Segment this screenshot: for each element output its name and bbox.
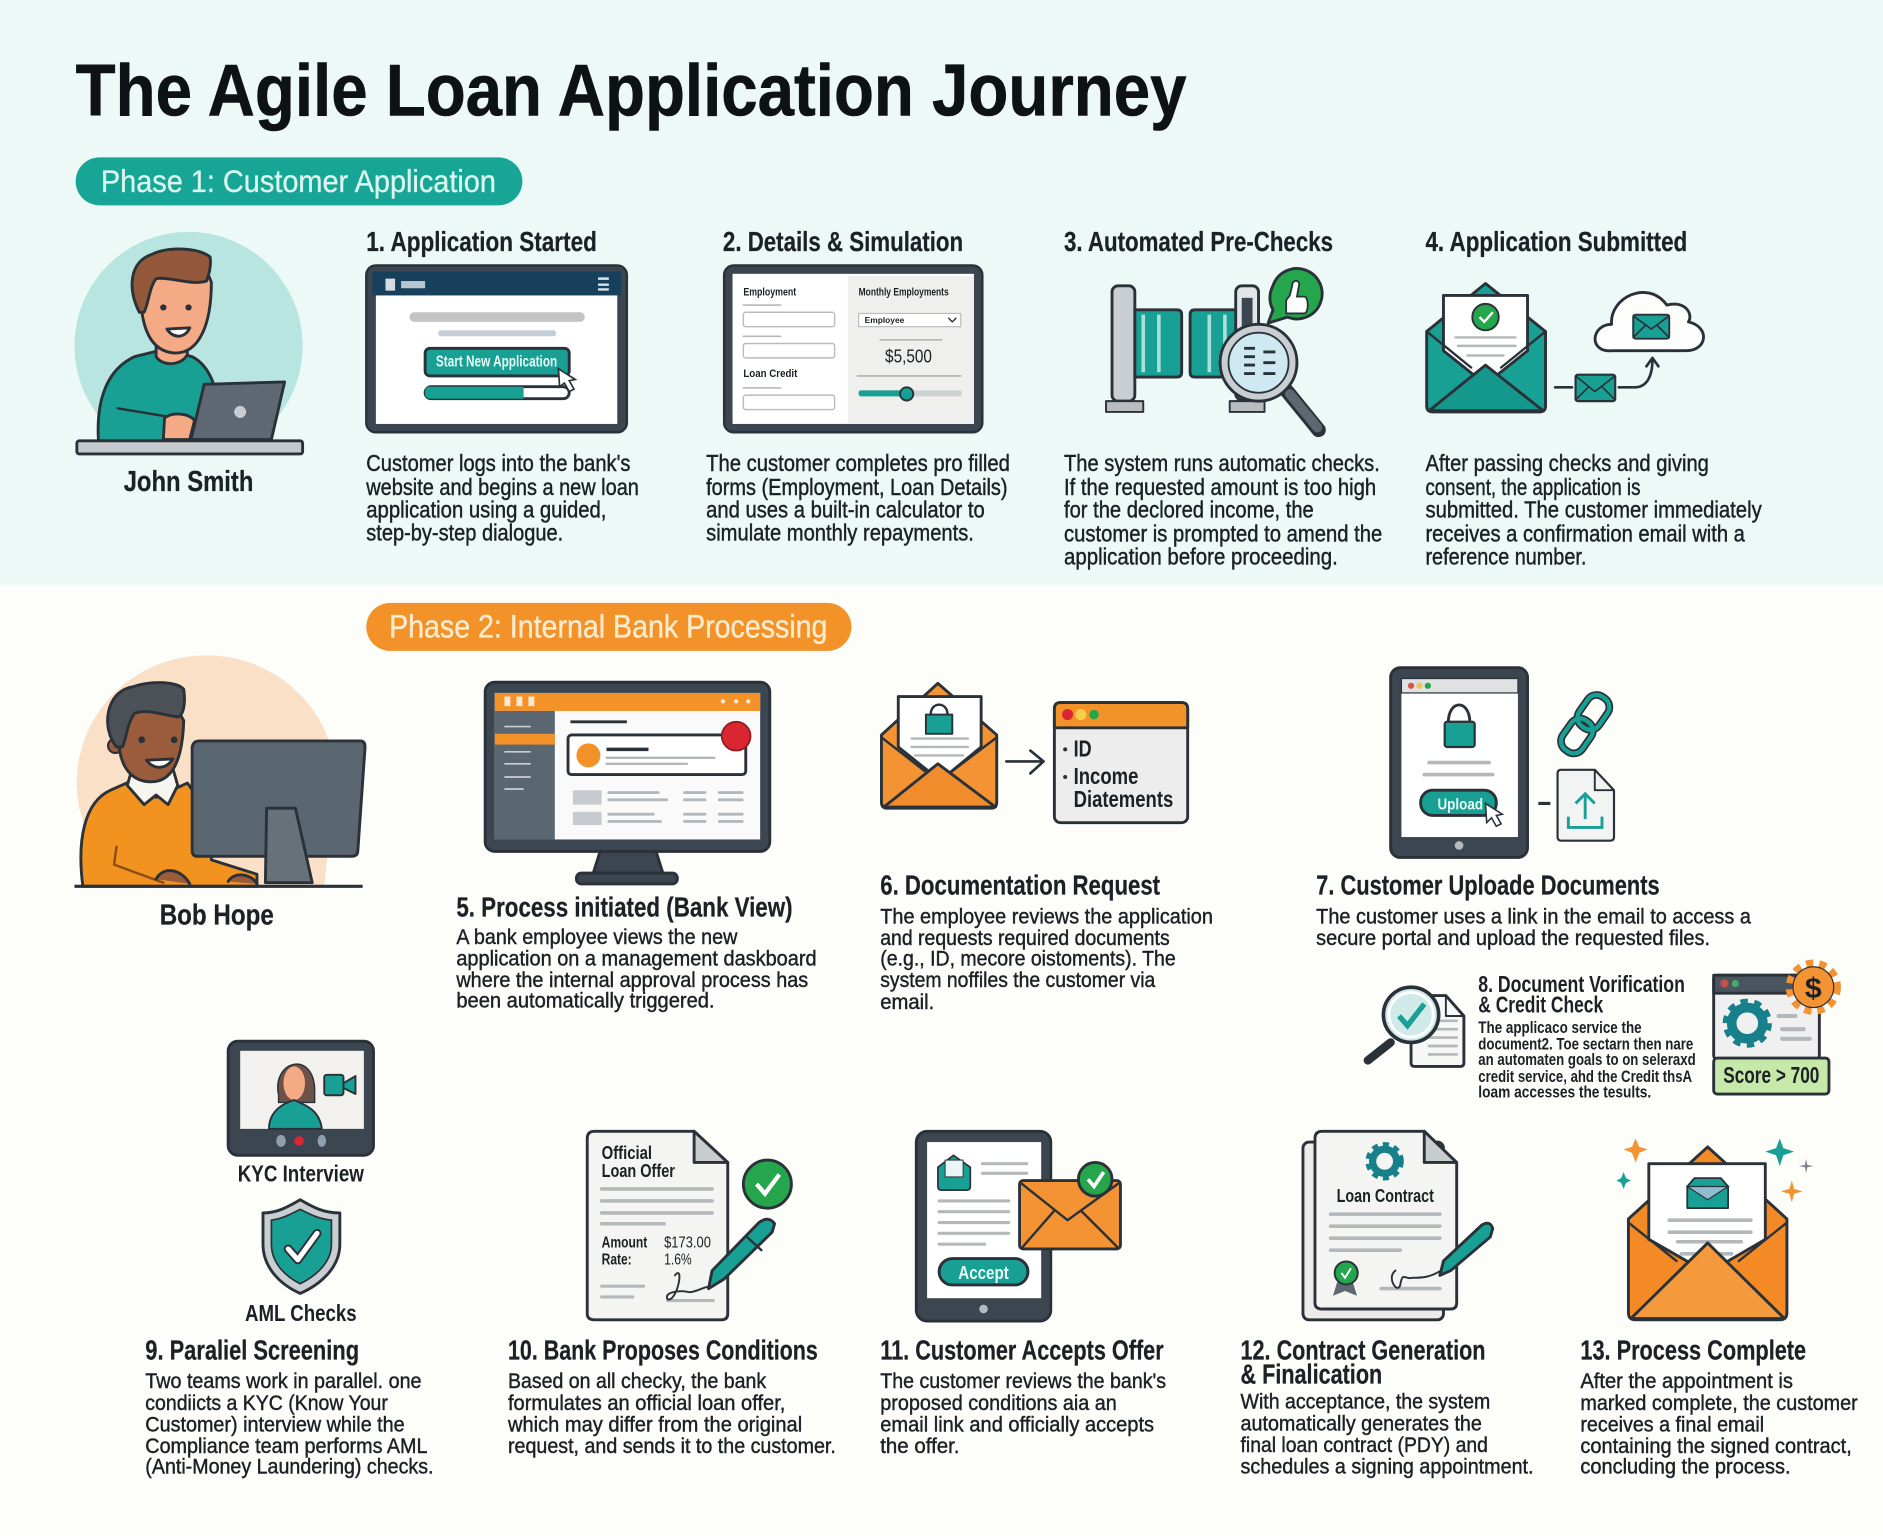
description: request, and sends it to the customer. — [508, 1433, 836, 1458]
heading: 12. Contract Generation — [1241, 1334, 1486, 1365]
description: receives a final email — [1580, 1411, 1764, 1436]
phase 1 pill — [76, 157, 522, 205]
phase 2 pill: Phase 2: Internal Bank Processing — [389, 609, 827, 645]
description: schedules a signing appointment. — [1241, 1454, 1534, 1479]
description: and uses a built-in calculator to — [706, 497, 985, 523]
description: credit service, ahd the Credit thsA — [1478, 1068, 1692, 1086]
description: system noffiles the customer via — [880, 967, 1156, 992]
icon: envelope with document list: Diatements — [1074, 786, 1173, 812]
description — [1316, 904, 1752, 950]
description: containing the signed contract, — [1580, 1433, 1852, 1458]
step 4: application submitted — [1425, 226, 1762, 569]
icon: bank dashboard monitor — [485, 682, 770, 884]
description: marked complete, the customer — [1580, 1390, 1858, 1415]
description: After the appointment is — [1580, 1368, 1793, 1393]
icon: form and calculator — [724, 265, 982, 432]
icon: gate and magnifier — [1106, 269, 1322, 430]
heading: 9. Paraliel Screening — [145, 1334, 359, 1365]
description: The system runs automatic checks. — [1064, 450, 1380, 476]
heading: 13. Process Complete — [1580, 1334, 1806, 1365]
step 13: process complete — [1580, 1138, 1858, 1479]
description: Based on all checky, the bank — [508, 1368, 766, 1393]
description: application on a management daskboard — [456, 946, 817, 971]
icon: envelope with document list: ID — [1074, 736, 1092, 762]
icon: official loan offer document: Loan Offer — [602, 1160, 675, 1181]
phase 1 pill: Phase 1: Customer Application — [101, 164, 496, 199]
description: After passing checks and giving — [1425, 450, 1709, 476]
description: final loan contract (PDY) and — [1241, 1432, 1488, 1457]
heading: & Credit Check — [1478, 991, 1603, 1017]
description: document2. Toe sectarn then nare — [1478, 1036, 1693, 1054]
step 8: document verification and credit check — [1368, 963, 1837, 1102]
description: customer is prompted to amend the — [1064, 521, 1382, 547]
persona: John Smith — [74, 232, 303, 498]
description: With acceptance, the system — [1241, 1389, 1490, 1414]
icon: official loan offer document: 1.6% — [664, 1252, 692, 1269]
description: (Anti-Money Laundering) checks. — [145, 1454, 434, 1479]
description: proposed conditions aia an — [880, 1390, 1117, 1415]
icon: tablet with accepted email: Accept — [958, 1263, 1009, 1283]
description — [455, 924, 817, 1013]
icon: signed loan contract: Loan Contract — [1337, 1185, 1434, 1206]
persona name: John Smith — [124, 466, 253, 498]
heading: 4. Application Submitted — [1425, 226, 1687, 257]
step 2: details and simulation — [706, 226, 1010, 545]
icon: official loan offer document: Official — [602, 1142, 652, 1163]
heading: 2. Details & Simulation — [723, 226, 963, 257]
icon: AML shield — [263, 1200, 340, 1293]
description: If the requested amount is too high — [1064, 474, 1376, 500]
icon: envelope with document list — [881, 683, 1188, 823]
heading: 1. Application Started — [366, 226, 597, 257]
step 7: customer upload documents — [1316, 668, 1752, 950]
description: automatically generates the — [1241, 1410, 1482, 1435]
description — [1580, 1368, 1858, 1479]
description — [880, 904, 1213, 1014]
description: Two teams work in parallel. one — [145, 1368, 422, 1393]
step 11: customer accepts offer — [880, 1131, 1166, 1458]
heading: 11. Customer Accepts Offer — [880, 1334, 1164, 1365]
description: secure portal and upload the requested files. — [1316, 925, 1710, 950]
description: which may differ from the original — [507, 1411, 802, 1436]
icon: tablet upload portal: Upload — [1437, 796, 1483, 813]
panel: phase 1 customer application — [74, 157, 1762, 569]
icon: official loan offer document: $173.00 — [664, 1235, 711, 1252]
description: The applicaco service the — [1478, 1019, 1642, 1037]
description: The customer reviews the bank's — [880, 1368, 1166, 1393]
description — [365, 450, 639, 545]
description: for the declored income, the — [1064, 497, 1314, 523]
icon: official loan offer document: Rate: — [602, 1252, 632, 1269]
description: condiicts a KYC (Know Your — [145, 1390, 388, 1415]
icon: KYC video call tablet — [228, 1041, 373, 1155]
description: submitted. The customer immediately — [1425, 497, 1762, 523]
description: reference number. — [1425, 543, 1586, 569]
description: receives a confirmation email with a — [1425, 521, 1745, 547]
description — [145, 1368, 434, 1479]
step 10: bank proposes conditions — [507, 1131, 836, 1458]
description: application using a guided, — [366, 497, 606, 523]
AML label: AML Checks — [245, 1300, 357, 1326]
heading — [1478, 971, 1685, 1017]
heading: 8. Document Vorification — [1478, 971, 1685, 997]
icon: form and calculator: Employment — [743, 286, 796, 298]
description: an automaten goals to on seleraxd — [1478, 1051, 1696, 1069]
description: step-by-step dialogue. — [366, 519, 563, 545]
description: email link and officially accepts — [880, 1411, 1154, 1436]
description: email. — [880, 989, 934, 1014]
icon: final email with sparkles — [1616, 1138, 1813, 1320]
description: (e.g., ID, mecore oistoments). The — [880, 946, 1176, 971]
description: consent, the application is — [1425, 474, 1640, 500]
icon: credit score window: $ — [1805, 973, 1822, 1005]
description: the offer. — [880, 1433, 960, 1458]
step 1: application started — [365, 226, 639, 545]
description: simulate monthly repayments. — [706, 519, 974, 545]
step 12: contract generation and finalisation — [1241, 1131, 1534, 1479]
step 3: automated pre-checks — [1064, 226, 1382, 569]
description — [880, 1368, 1166, 1458]
heading: 7. Customer Uploade Documents — [1316, 870, 1660, 901]
icon: form and calculator: $5,500 — [885, 347, 932, 367]
description: Compliance team performs AML — [145, 1433, 428, 1458]
description: and requests required documents — [880, 925, 1170, 950]
description: The customer completes pro filled — [706, 450, 1010, 476]
icon: form and calculator: Loan Credit — [743, 368, 798, 380]
description: The customer uses a link in the email to access a — [1316, 904, 1752, 929]
description: been automatically triggered. — [456, 988, 715, 1013]
step 9: parallel screening — [145, 1041, 434, 1479]
icon: form and calculator: Monthly Employments — [859, 286, 949, 298]
step 6: documentation request — [880, 683, 1213, 1014]
icon: signed loan contract — [1303, 1131, 1493, 1320]
phase 2 pill — [366, 603, 851, 651]
description: formulates an official loan offer, — [508, 1390, 785, 1415]
description: concluding the process. — [1580, 1454, 1791, 1479]
heading — [1241, 1334, 1486, 1389]
description: A bank employee views the new — [456, 924, 738, 949]
description — [1425, 450, 1762, 569]
panel: phase 2 internal bank processing — [74, 603, 1858, 1479]
icon: envelope with document list: Income — [1074, 763, 1138, 789]
icon: browser with start button — [366, 265, 627, 432]
icon: official loan offer document — [587, 1131, 791, 1320]
description — [706, 450, 1010, 545]
icon: tablet upload portal — [1391, 668, 1614, 857]
heading: 5. Process initiated (Bank View) — [456, 891, 793, 922]
icon: credit score window: Score > 700 — [1723, 1062, 1819, 1088]
persona: Bob Hope — [74, 655, 365, 932]
KYC label: KYC Interview — [238, 1161, 364, 1187]
step 5: process initiated — [455, 682, 817, 1013]
description: The employee reviews the application — [880, 904, 1213, 929]
icon: tablet with accepted email — [916, 1131, 1120, 1321]
description — [1478, 1019, 1696, 1102]
icon: official loan offer document: Amount — [602, 1235, 647, 1252]
heading: 6. Documentation Request — [880, 870, 1160, 901]
persona name: Bob Hope — [160, 900, 274, 932]
description — [1064, 450, 1382, 569]
icon: magnifier over document — [1368, 987, 1464, 1066]
description: Customer) interview while the — [145, 1411, 405, 1436]
description: application before proceeding. — [1064, 543, 1338, 569]
description — [507, 1368, 836, 1458]
icon: credit score window — [1714, 963, 1837, 1094]
description: where the internal approval process has — [455, 967, 808, 992]
description: website and begins a new loan — [365, 474, 639, 500]
heading: 10. Bank Proposes Conditions — [508, 1334, 818, 1365]
description — [1241, 1389, 1534, 1479]
heading: & Finalication — [1241, 1358, 1382, 1389]
description: Customer logs into the bank's — [366, 450, 630, 476]
title: The Agile Loan Application Journey — [76, 49, 1187, 131]
heading: 3. Automated Pre-Checks — [1064, 226, 1333, 257]
description: loam accesses the tesults. — [1478, 1084, 1651, 1102]
icon: confirmation email and cloud — [1427, 283, 1704, 412]
description: forms (Employment, Loan Details) — [706, 474, 1008, 500]
icon: form and calculator: Employee — [865, 315, 905, 325]
icon: browser with start button: Start New Application — [436, 353, 557, 370]
